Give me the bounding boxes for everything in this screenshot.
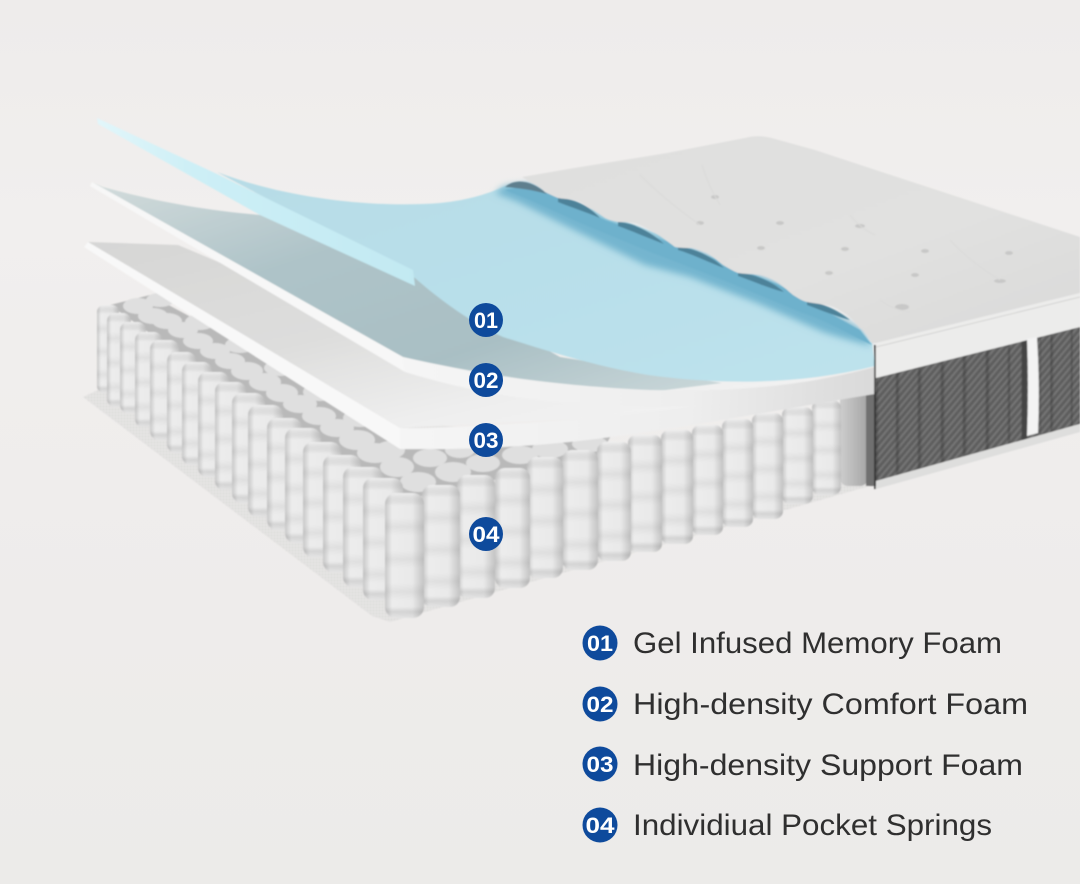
spring base fabric (83, 390, 875, 622)
pocket spring tops, inner rows (123, 293, 608, 492)
legend item 03: 03 (586, 752, 614, 777)
badge 03 on layers: 03 (474, 428, 498, 453)
legend item 02: 02 (586, 692, 614, 717)
mattress tufts and quilting creases (640, 165, 1013, 312)
legend item 01: Gel Infused Memory Foam (633, 627, 1002, 660)
gel foam side edge (97, 118, 415, 286)
pocket springs, right front row (422, 393, 868, 607)
mattress quilted top (522, 136, 1080, 343)
badge 04 on layers (469, 517, 503, 551)
legend item 03: High-density Support Foam (633, 749, 1023, 782)
layer 3: support foam (84, 242, 875, 449)
layer 2: comfort foam (90, 182, 875, 407)
bottom piping (876, 424, 1080, 489)
legend item 02: High-density Comfort Foam (633, 688, 1028, 721)
gel foam darker edge band (495, 183, 872, 346)
mattress scallop shadows (505, 182, 850, 320)
mattress cross-section illustration (83, 118, 1080, 622)
mattress side border (876, 293, 1080, 378)
legend item 04: 04 (586, 813, 615, 838)
layer 1: gel memory foam (97, 118, 875, 382)
white tag strip (1027, 337, 1039, 436)
legend (582, 626, 1028, 842)
corner pocket spring (385, 493, 424, 618)
shadowed gaps between springs (110, 295, 620, 500)
pocket springs, left front row (97, 305, 403, 600)
badge 03 on layers (469, 423, 503, 457)
badge 02 on layers: 02 (474, 368, 498, 393)
legend item 01: 01 (587, 631, 613, 656)
shaded gap beside mattress (866, 392, 876, 486)
badge 04 on layers: 04 (472, 522, 500, 547)
dark side panel (875, 320, 1080, 490)
legend item 04: Individiual Pocket Springs (633, 809, 992, 842)
badge 01 on layers: 01 (474, 308, 498, 333)
badge 02 on layers (469, 363, 503, 397)
badge 01 on layers (469, 303, 503, 337)
